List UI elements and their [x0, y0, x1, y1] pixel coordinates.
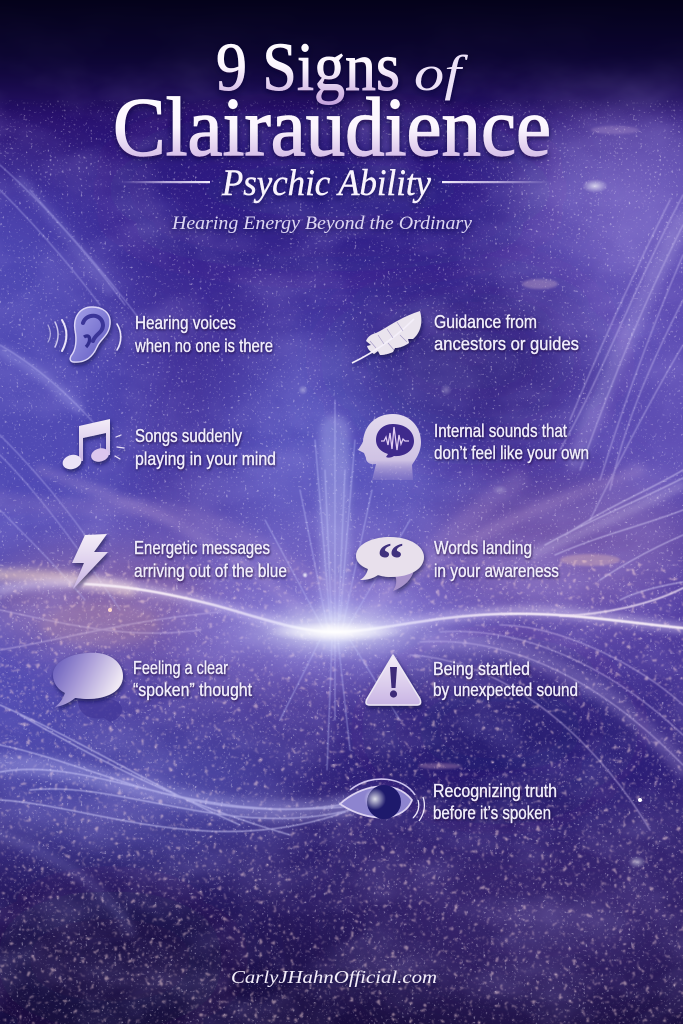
heading: 9 Signs of: 9 Signs — [216, 29, 400, 105]
right fan — [545, 470, 683, 600]
vertical beams — [265, 400, 410, 770]
tagline: Hearing Energy Beyond the Ordinary — [171, 213, 473, 234]
main wave glow — [0, 583, 683, 632]
subtitle rule right — [442, 181, 550, 183]
footer: website: CarlyJHahnOfficial.com — [231, 967, 437, 987]
icon: warning triangle — [366, 655, 421, 705]
icon: speech bubble — [53, 653, 123, 724]
label: Guidance from — [434, 312, 537, 332]
icon: lightning bolt — [72, 534, 108, 589]
label: Hearing voices — [135, 313, 236, 333]
label: Internal sounds that — [434, 421, 567, 441]
sign 1: hearing voices — [48, 307, 273, 362]
label — [134, 538, 287, 581]
icon: music notes — [61, 419, 124, 471]
streaks right — [560, 195, 683, 520]
icon: head with waveform — [358, 414, 421, 480]
label — [135, 426, 276, 469]
energy streams and light wave — [0, 126, 683, 930]
label: in your awareness — [434, 561, 559, 581]
heading: 9 Signs of: of — [414, 45, 468, 101]
icon: feather — [352, 311, 421, 363]
lower left streams to the eye — [0, 705, 352, 835]
icon: quote bubble — [356, 533, 424, 591]
arcs below the wave — [0, 610, 683, 830]
title — [113, 29, 551, 234]
nebula sparkles — [40, 126, 646, 868]
label: Energetic messages — [134, 538, 270, 558]
label — [433, 659, 578, 700]
subtitle rule left — [120, 181, 210, 183]
label: Words landing — [434, 538, 532, 558]
label: Feeling a clear — [133, 658, 228, 678]
label — [434, 312, 579, 354]
label: by unexpected sound — [433, 680, 578, 700]
label: when no one is there — [134, 336, 273, 356]
icon: glowing eye — [340, 779, 424, 821]
label: ancestors or guides — [434, 334, 579, 354]
label: before it’s spoken — [433, 803, 551, 823]
sign 4: spoken thought — [53, 653, 252, 724]
streaks upper left — [0, 165, 140, 610]
icon: quote bubble: “ — [377, 533, 404, 584]
label: Being startled — [433, 659, 530, 679]
sign 3: energetic messages — [72, 534, 287, 589]
label — [134, 313, 273, 356]
purple curtains — [0, 480, 520, 590]
label: “spoken” thought — [133, 680, 252, 700]
icon: ear with sound waves — [48, 307, 121, 362]
sign 6: internal sounds — [358, 414, 589, 480]
sign 7: words landing — [356, 533, 559, 591]
heading: Clairaudience: Clairaudience — [113, 81, 551, 174]
sign 2: songs — [61, 419, 276, 471]
sign 9: recognizing truth — [340, 779, 557, 823]
label: Recognizing truth — [433, 781, 557, 801]
label — [434, 538, 559, 581]
label: playing in your mind — [135, 449, 276, 469]
label: arriving out of the blue — [134, 561, 287, 581]
left warm band — [0, 575, 130, 590]
subtitle: Psychic Ability: Psychic Ability — [221, 163, 432, 204]
label — [434, 421, 589, 463]
sign 5: guidance — [352, 311, 579, 363]
label — [133, 658, 252, 700]
central glow — [145, 570, 525, 690]
sign 8: being startled — [366, 655, 578, 705]
label: Songs suddenly — [135, 426, 242, 446]
label: don’t feel like your own — [434, 443, 589, 463]
label — [433, 781, 557, 823]
